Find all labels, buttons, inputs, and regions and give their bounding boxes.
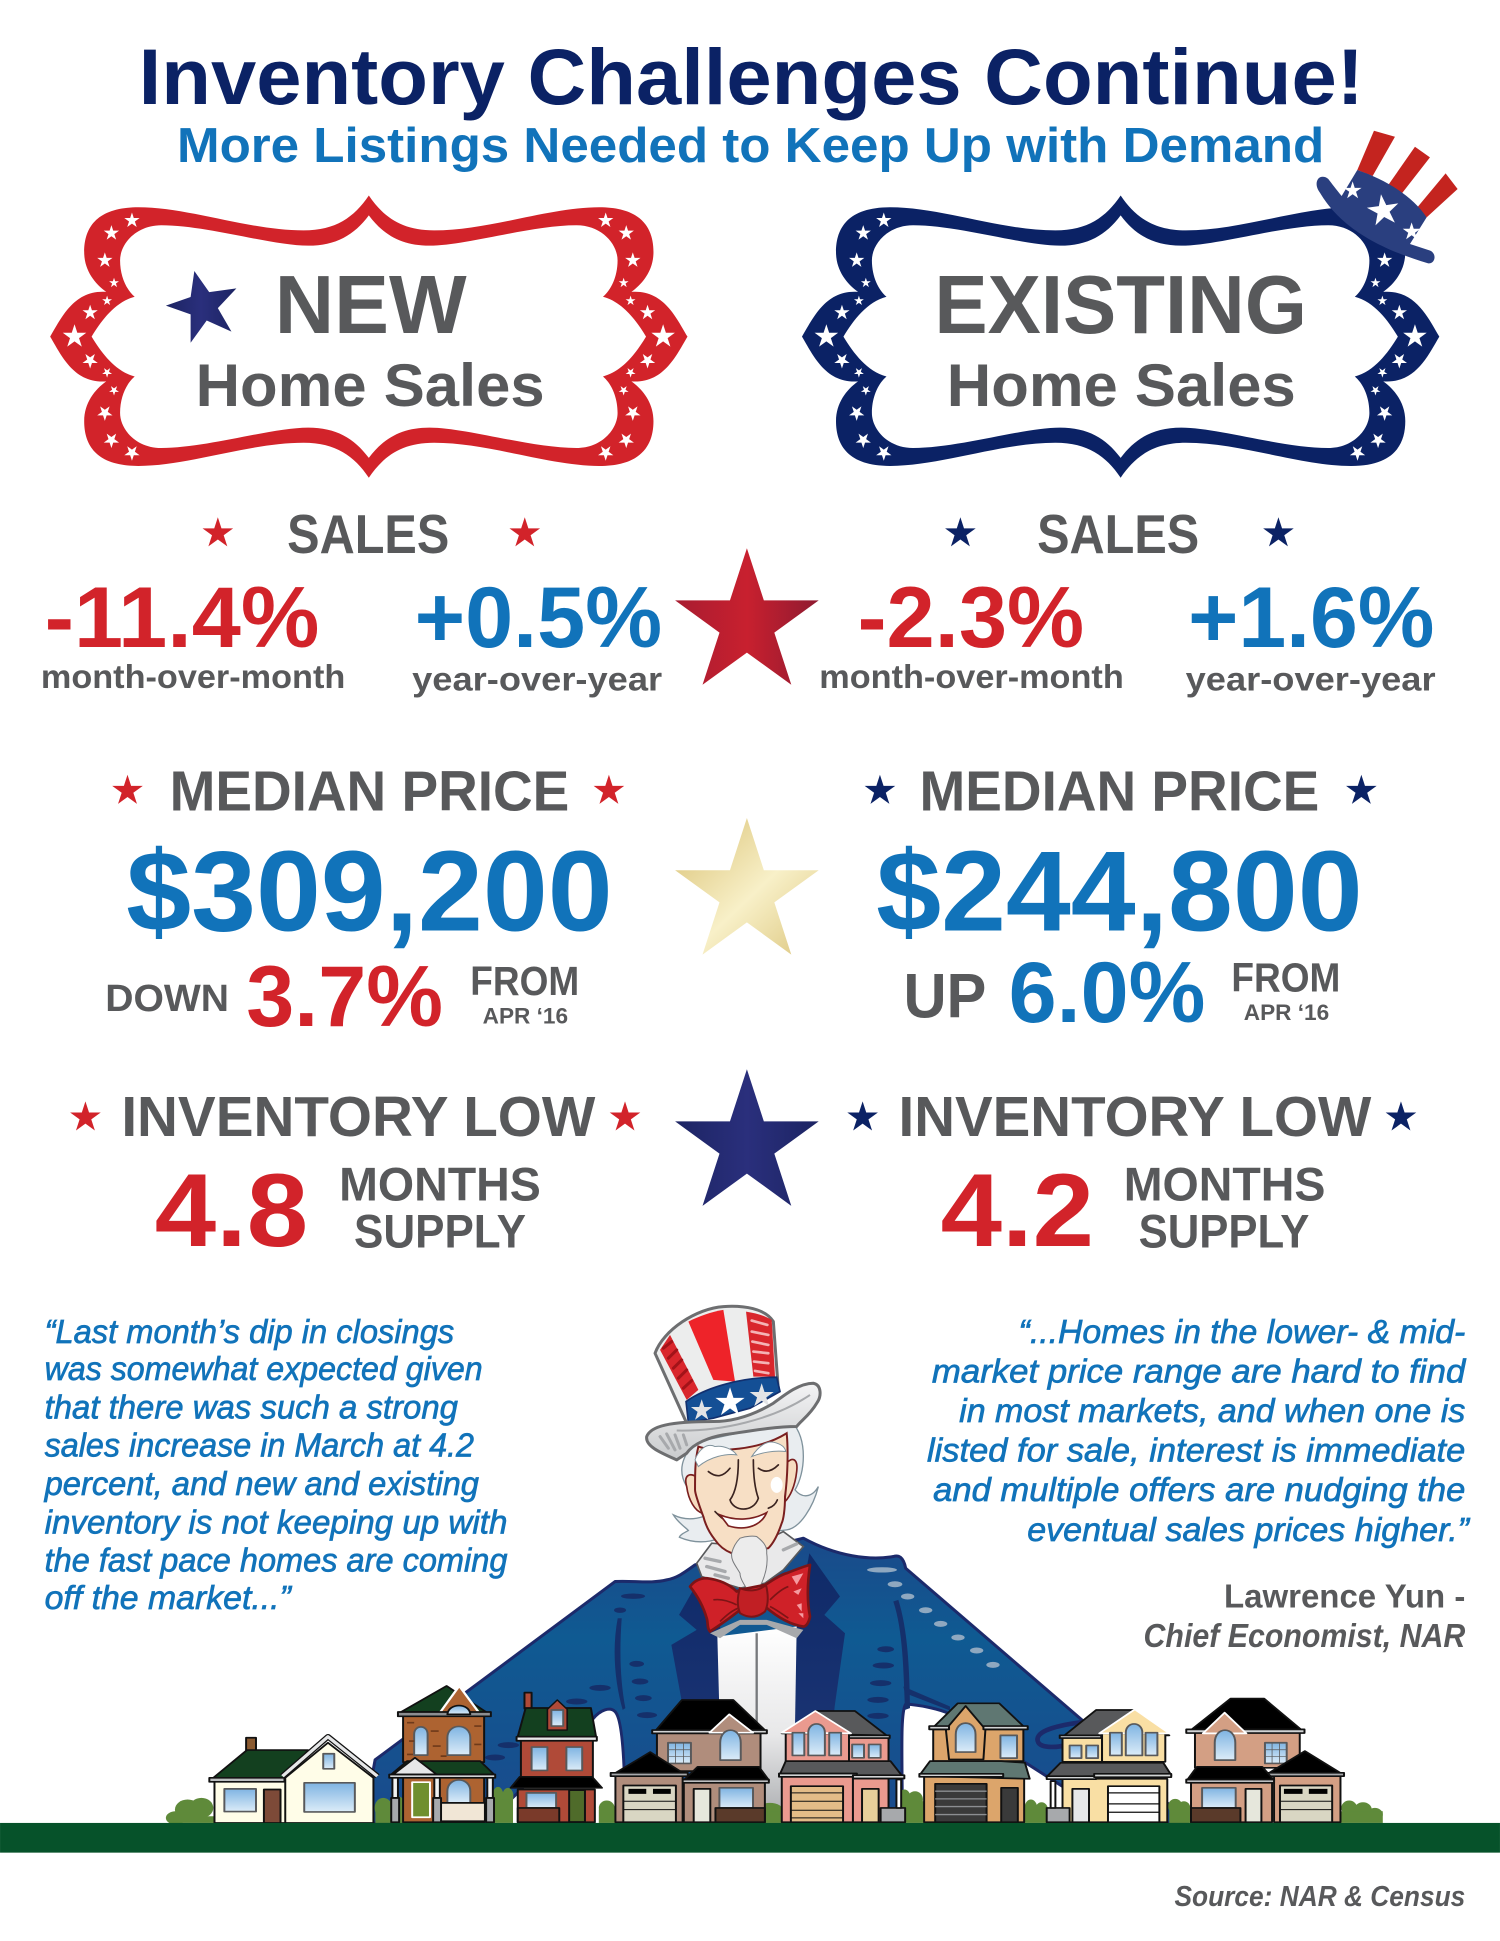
houses, left group bbox=[209, 1686, 769, 1823]
stats: new median price: FROM bbox=[470, 958, 579, 1004]
icon: gold star bbox=[675, 818, 819, 955]
house 6: tan bbox=[919, 1703, 1030, 1822]
text block: right quote bbox=[927, 1314, 1471, 1549]
stats: new median price: MEDIAN PRICE bbox=[170, 760, 569, 824]
stats: new inventory: MONTHS bbox=[339, 1157, 541, 1210]
attribution: Lawrence Yun - bbox=[1224, 1579, 1465, 1616]
stats: new inventory: 4.8 bbox=[155, 1153, 308, 1269]
source note: Source: NAR & Census bbox=[1174, 1881, 1465, 1913]
stats: new home sales: SALES bbox=[287, 504, 449, 565]
stats: existing median price: MEDIAN PRICE bbox=[920, 760, 1319, 824]
bow tie shadow bbox=[710, 1620, 803, 1638]
text block: left quote: inventory is not keeping up with bbox=[45, 1504, 507, 1541]
icon: striped hat on frame bbox=[1317, 131, 1458, 263]
stats: new median price: DOWN bbox=[105, 977, 229, 1020]
attribution bbox=[1144, 1579, 1465, 1655]
stats: existing inventory: MONTHS bbox=[1124, 1157, 1325, 1210]
house 8: peach brick bbox=[1186, 1699, 1344, 1822]
text block: left quote: off the market...” bbox=[45, 1580, 293, 1617]
stats: new inventory: INVENTORY LOW bbox=[121, 1085, 596, 1149]
text block: right quote: in most markets, and when one is bbox=[959, 1393, 1466, 1430]
lapels bbox=[671, 1553, 845, 1757]
text block: right quote: and multiple offers are nudging the bbox=[933, 1472, 1465, 1509]
house 1: cream bbox=[209, 1737, 377, 1823]
text block: right quote: listed for sale, interest is immediate bbox=[927, 1433, 1465, 1470]
house 4: taupe brick bbox=[611, 1700, 769, 1822]
stats: existing inventory: 4.2 bbox=[941, 1153, 1094, 1269]
eyebrows bbox=[695, 1445, 737, 1467]
stats: existing home sales: month-over-month bbox=[819, 659, 1124, 696]
stats: existing median price: FROM bbox=[1231, 954, 1340, 1000]
stats: existing home sales: year-over-year bbox=[1186, 662, 1436, 699]
text block: left quote: that there was such a strong bbox=[45, 1389, 458, 1426]
stats: new home sales: year-over-year bbox=[412, 662, 662, 699]
text block: right quote: market price range are hard to find bbox=[932, 1353, 1467, 1390]
stats: new inventory: SUPPLY bbox=[354, 1204, 526, 1257]
icon: navy star bbox=[675, 1069, 819, 1206]
stats: existing median price bbox=[865, 760, 1377, 1041]
stats: existing median price: APR ‘16 bbox=[1244, 1000, 1329, 1025]
icon: red star bbox=[675, 548, 819, 685]
text block: left quote bbox=[44, 1314, 508, 1617]
stats: existing home sales: +1.6% bbox=[1188, 570, 1434, 666]
stats: new inventory bbox=[70, 1085, 640, 1269]
bushes, right part bbox=[756, 1790, 1383, 1823]
house 3: red brick bbox=[511, 1693, 602, 1822]
stats: new median price bbox=[105, 760, 624, 1045]
face bbox=[695, 1433, 788, 1553]
hair bbox=[673, 1422, 818, 1542]
panel: new home sales frame: NEW bbox=[275, 258, 467, 351]
attribution: Chief Economist, NAR bbox=[1144, 1618, 1465, 1655]
panel: existing home sales frame bbox=[802, 196, 1439, 478]
stats: existing inventory: SUPPLY bbox=[1139, 1204, 1309, 1257]
text block: left quote: the fast pace homes are coming bbox=[45, 1543, 508, 1580]
illustration: Uncle Sam bbox=[363, 1306, 1188, 1823]
stats: new home sales bbox=[41, 504, 662, 699]
stats: existing home sales bbox=[819, 504, 1436, 699]
panel: existing home sales frame: Home Sales bbox=[947, 351, 1296, 419]
house 7: pale yellow bbox=[1047, 1709, 1171, 1822]
text block: left quote: was somewhat expected given bbox=[45, 1351, 483, 1388]
shirt bbox=[717, 1627, 797, 1823]
stats: existing median price: $244,800 bbox=[876, 829, 1363, 956]
stats: new median price: APR ‘16 bbox=[483, 1003, 568, 1028]
bushes, left part bbox=[166, 1787, 617, 1825]
eyes, nose, mouth bbox=[708, 1460, 778, 1522]
goatee bbox=[732, 1536, 767, 1600]
stats: existing median price: UP bbox=[903, 961, 986, 1031]
stats: existing home sales: -2.3% bbox=[858, 570, 1084, 666]
house 2: orange brick bbox=[389, 1686, 495, 1822]
text block: left quote: percent, and new and existing bbox=[44, 1466, 479, 1503]
cuff curl bbox=[1037, 1723, 1079, 1747]
houses, right group bbox=[779, 1699, 1344, 1822]
stats: new home sales: -11.4% bbox=[45, 570, 319, 666]
title: Inventory Challenges Continue! bbox=[139, 32, 1364, 121]
stats: new median price: 3.7% bbox=[246, 949, 443, 1045]
text block: right quote: eventual sales prices higher.” bbox=[1027, 1512, 1471, 1549]
hat band bbox=[686, 1377, 780, 1423]
stats: existing inventory bbox=[847, 1085, 1416, 1269]
sleeve details bbox=[485, 1594, 950, 1761]
ears bbox=[686, 1475, 703, 1513]
coat bbox=[363, 1538, 1188, 1823]
text block: left quote: sales increase in March at 4.2 bbox=[45, 1428, 474, 1465]
panel: existing home sales frame: EXISTING bbox=[934, 258, 1307, 351]
house 5: pink bbox=[779, 1711, 905, 1822]
collar bbox=[697, 1532, 803, 1588]
hat brim bbox=[647, 1383, 820, 1460]
stats: new home sales: +0.5% bbox=[415, 570, 662, 666]
ground bbox=[0, 1823, 1500, 1853]
subtitle: More Listings Needed to Keep Up with Demand bbox=[177, 118, 1324, 173]
bow tie bbox=[690, 1565, 810, 1632]
stats: existing median price: 6.0% bbox=[1009, 945, 1205, 1041]
text block: right quote: “...Homes in the lower- & mid- bbox=[1019, 1314, 1465, 1351]
stats: new median price: $309,200 bbox=[126, 829, 613, 956]
panel: new home sales frame bbox=[50, 196, 688, 478]
hat crown bbox=[655, 1306, 778, 1423]
stats: existing home sales: SALES bbox=[1037, 504, 1199, 565]
stats: existing inventory: INVENTORY LOW bbox=[899, 1085, 1372, 1149]
text block: left quote: “Last month’s dip in closings bbox=[45, 1314, 455, 1351]
panel: new home sales frame: Home Sales bbox=[196, 351, 545, 419]
stats: new home sales: month-over-month bbox=[41, 659, 345, 696]
